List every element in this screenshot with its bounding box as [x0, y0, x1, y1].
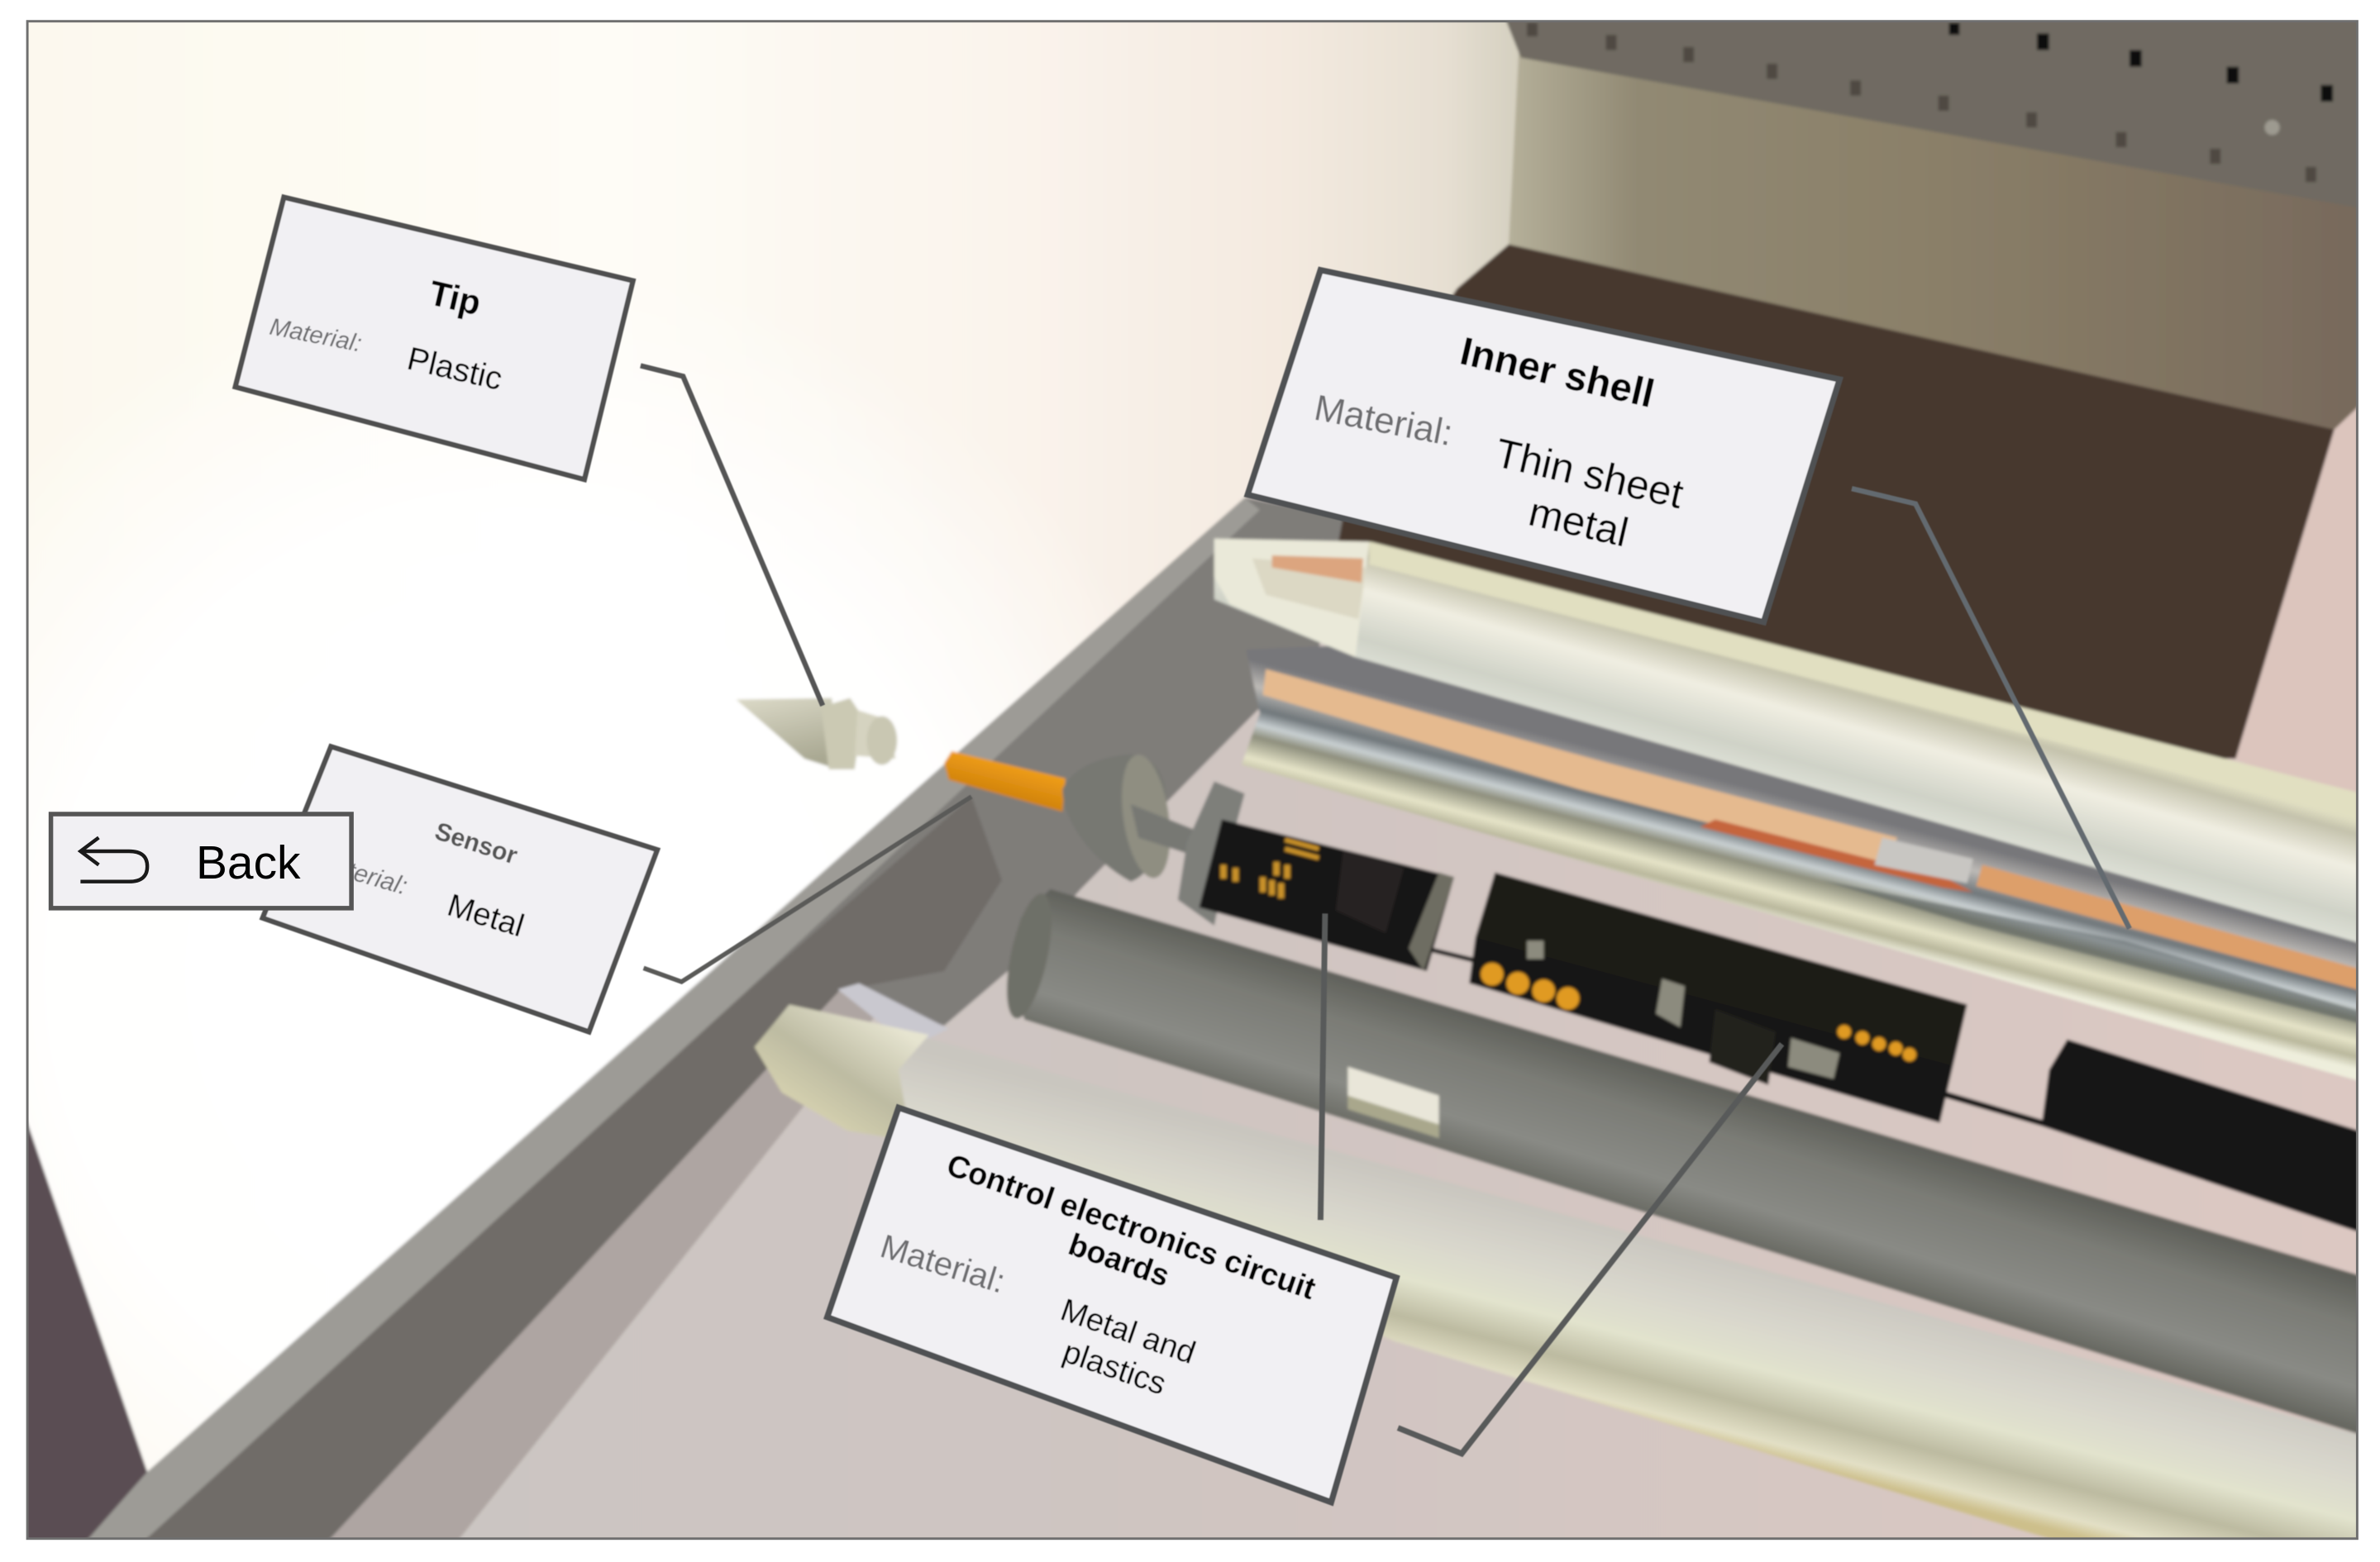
back button — [51, 814, 351, 908]
material value: Thin sheet — [1490, 429, 1688, 517]
material value — [1490, 429, 1688, 555]
card: Inner shell — [1247, 270, 1839, 622]
circuit board large — [1469, 873, 1967, 1123]
copper detail — [1272, 555, 1363, 583]
taupe floor band — [322, 991, 877, 1548]
material label: Material: — [876, 1226, 1009, 1300]
dark core of ledge — [136, 797, 1002, 1548]
leader: tip — [641, 365, 823, 706]
label: Back — [196, 836, 301, 889]
material label: Material: — [1311, 388, 1456, 454]
lower half shell with copper core — [1242, 645, 2368, 1083]
material value: Plastic — [404, 340, 506, 398]
leader: board 1 — [1320, 913, 1325, 1220]
sensor with orange rod — [944, 751, 1245, 926]
background: concrete ledge — [80, 498, 1343, 1548]
title: boards — [1064, 1227, 1174, 1294]
background: dark shelf — [1290, 245, 2335, 759]
background: pink floor — [459, 498, 2356, 1537]
card: Control electronics circuit boards — [828, 1107, 1396, 1502]
background: pink side wall — [2333, 407, 2356, 433]
background: rear wall — [1508, 53, 2356, 431]
copper core — [1263, 669, 1897, 868]
light top edge of ledge — [80, 498, 1260, 1548]
black cylinder — [2042, 1040, 2368, 1236]
material value: metal — [1524, 488, 1633, 555]
leader: sensor — [644, 797, 971, 982]
window cutout — [1347, 1067, 1439, 1138]
tip part — [737, 698, 897, 769]
card: Tip — [236, 198, 633, 479]
leader: inner shell — [1852, 488, 2130, 929]
stem and bracket — [1131, 804, 1200, 857]
gray outer tube — [998, 889, 2368, 1437]
material label: Material: — [268, 313, 364, 358]
icon: back arrow — [80, 837, 147, 882]
orange rod — [944, 751, 1066, 812]
material value: plastics — [1058, 1334, 1171, 1402]
title: Sensor — [432, 817, 521, 870]
title: Inner shell — [1456, 330, 1658, 417]
wires — [1419, 947, 2052, 1126]
circuit board small — [1200, 819, 1454, 971]
gray dome — [1062, 755, 1166, 882]
background: perforated panel — [1505, 22, 2338, 202]
small lilac box — [837, 982, 946, 1037]
card: Sensor — [263, 746, 657, 1031]
cream outer tube — [755, 1004, 2368, 1548]
upper half shell — [1214, 539, 2368, 945]
leader: board 2 — [1398, 1044, 1782, 1454]
material value: Metal and — [1056, 1292, 1200, 1371]
leader lines — [641, 365, 2130, 1454]
background: white wall — [15, 12, 1521, 1472]
material label: Material: — [311, 848, 410, 900]
background: dark corner — [28, 1121, 149, 1537]
material value: Metal — [443, 888, 528, 944]
title: Tip — [426, 273, 484, 322]
title: Control electronics circuit — [942, 1148, 1320, 1307]
